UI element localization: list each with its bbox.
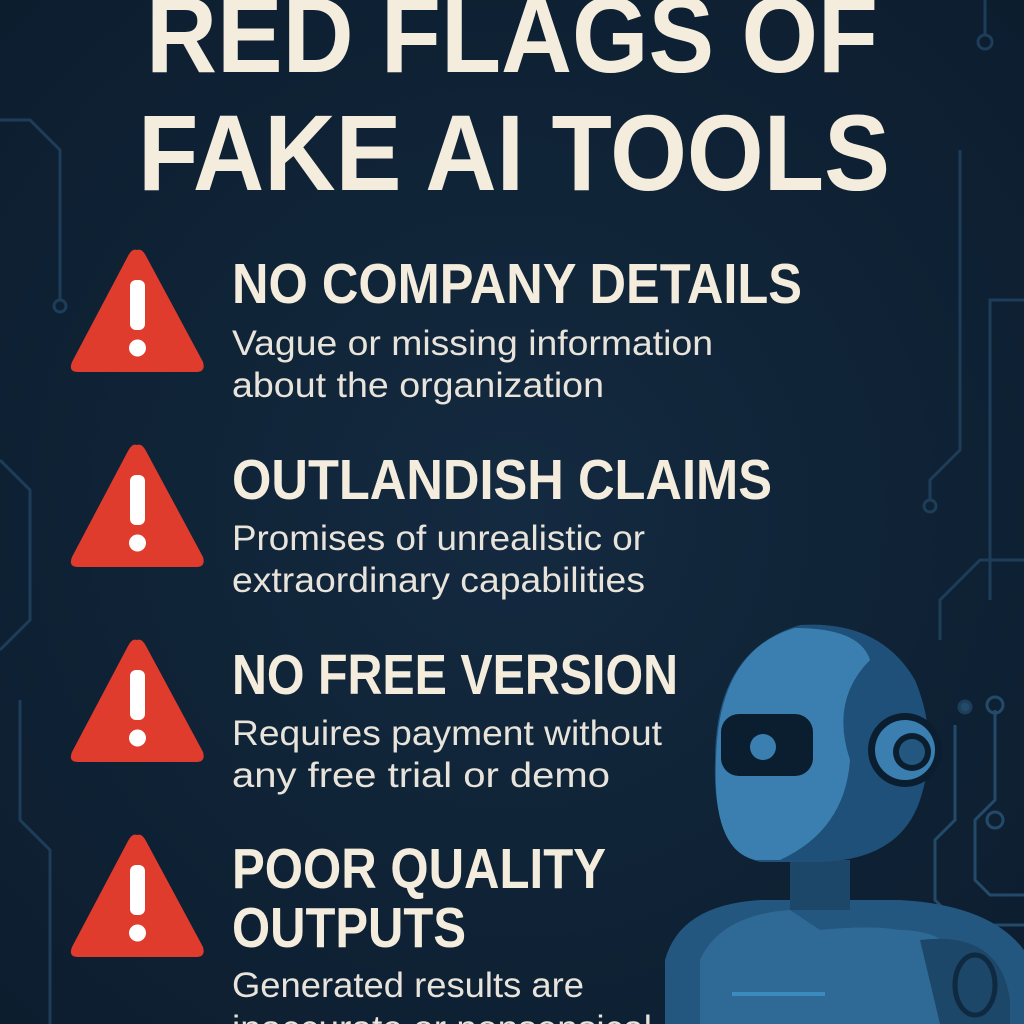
item 3: no free version: NO FREE VERSION: [232, 643, 678, 707]
icon: warning triangle: [71, 250, 204, 372]
item 2: outlandish claims: [71, 445, 772, 600]
item 4: poor quality outputs: OUTPUTS: [232, 896, 466, 960]
item 2: outlandish claims: extraordinary capabilities: [232, 561, 645, 600]
item 1: no company details: NO COMPANY DETAILS: [232, 252, 802, 316]
item 3: no free version: Requires payment without: [232, 714, 662, 753]
item 4: poor quality outputs: Generated results are: [232, 966, 584, 1005]
item 1: no company details: [71, 250, 802, 405]
item 2: outlandish claims: OUTLANDISH CLAIMS: [232, 448, 772, 512]
title: FAKE AI TOOLS: [138, 92, 890, 213]
icon: warning triangle: [71, 445, 204, 567]
title: [138, 0, 890, 213]
item 4: poor quality outputs: POOR QUALITY: [232, 837, 606, 901]
icon: warning triangle: [71, 640, 204, 762]
item 2: outlandish claims: Promises of unrealistic or: [232, 519, 645, 558]
item 1: no company details: Vague or missing information: [232, 324, 713, 363]
robot illustration: [665, 625, 1024, 1024]
item 3: no free version: any free trial or demo: [232, 756, 610, 795]
icon: warning triangle: [71, 835, 204, 957]
item 3: no free version: [71, 640, 678, 795]
item 1: no company details: about the organization: [232, 366, 604, 405]
item 4: poor quality outputs: [71, 835, 652, 1024]
